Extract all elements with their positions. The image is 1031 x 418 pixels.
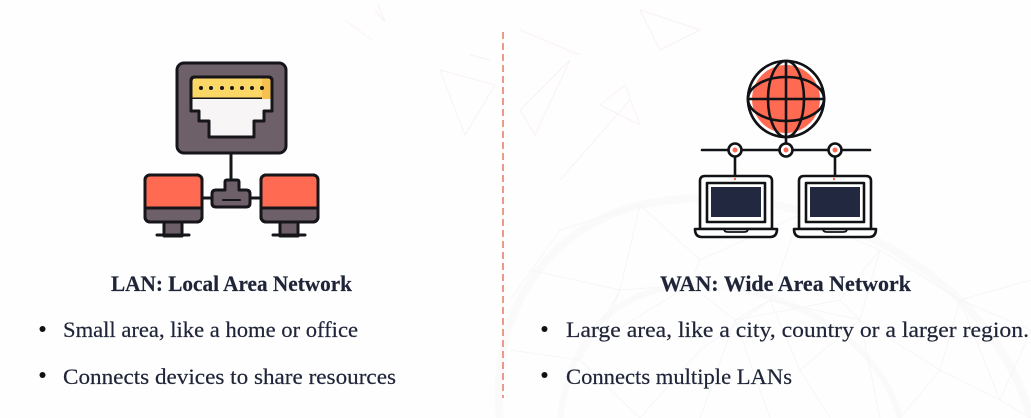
left laptop xyxy=(695,176,777,237)
WAN heading: WAN: Wide Area Network xyxy=(660,271,912,296)
icon: LAN router and computers xyxy=(145,63,318,236)
left computer xyxy=(145,175,202,236)
background network pattern xyxy=(345,5,1031,418)
icon: WAN globe and laptops xyxy=(695,61,876,237)
router box xyxy=(177,63,286,153)
globe xyxy=(748,61,824,137)
LAN bullet list xyxy=(40,317,396,389)
LAN bullet list: Small area, like a home or office xyxy=(63,317,358,342)
WAN bullet list: Large area, like a city, country or a larger region. xyxy=(566,317,1029,342)
LAN heading: LAN: Local Area Network xyxy=(111,271,353,296)
connection cables xyxy=(202,153,262,198)
dashed divider xyxy=(502,32,504,398)
network line and nodes xyxy=(702,137,870,175)
WAN bullet list: Connects multiple LANs xyxy=(566,364,792,389)
right laptop xyxy=(794,176,876,237)
right computer xyxy=(261,175,318,236)
ethernet port xyxy=(191,77,272,137)
network switch xyxy=(212,180,250,207)
WAN bullet list xyxy=(542,317,1029,389)
LAN bullet list: Connects devices to share resources xyxy=(63,364,396,389)
